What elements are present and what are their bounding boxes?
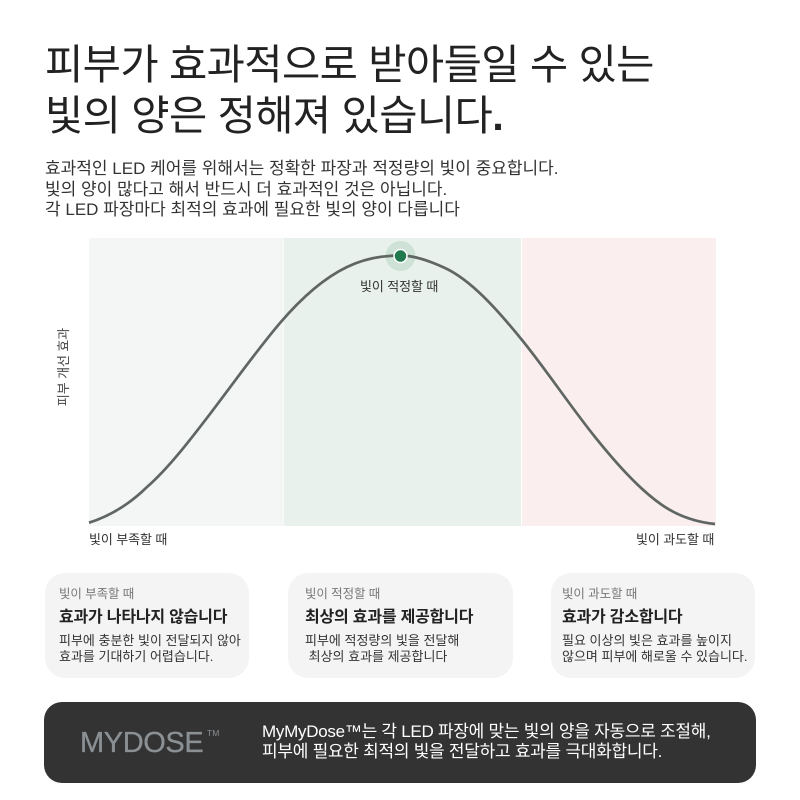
banner text: MyMyDose™는 각 LED 파장에 맞는 빛의 양을 자동으로 조절해, <box>262 722 711 741</box>
title <box>45 41 654 139</box>
panel text: 피부에 적정량의 빛을 전달해 <box>305 632 459 648</box>
intro text: 효과적인 LED 케어를 위해서는 정확한 파장과 적정량의 빛이 중요합니다. <box>45 159 558 178</box>
logo: MYDOSE <box>80 727 203 759</box>
panel tag: 빛이 과도할 때 <box>562 587 637 601</box>
logo: TM <box>207 728 219 738</box>
intro text: 각 LED 파장마다 최적의 효과에 필요한 빛의 양이 다릅니다 <box>45 200 460 219</box>
panel text: 효과를 기대하기 어렵습니다. <box>59 649 213 664</box>
zone: too little light <box>89 238 284 526</box>
zone: too much light <box>522 238 716 526</box>
banner text <box>262 722 711 760</box>
x axis label: low: 빛이 부족할 때 <box>89 532 167 547</box>
banner text: 피부에 필요한 최적의 빛을 전달하고 효과를 극대화합니다. <box>262 742 662 760</box>
panel: too much light <box>551 573 755 678</box>
x axis label: high: 빛이 과도할 때 <box>636 532 714 547</box>
panel text: 최상의 효과를 제공합니다 <box>309 649 447 664</box>
panel heading: 효과가 나타나지 않습니다 <box>59 609 227 626</box>
panel text: 피부에 충분한 빛이 전달되지 않아 <box>59 632 241 648</box>
title: 빛의 양은 정해져 있습니다. <box>45 92 503 139</box>
peak label: 빛이 적정할 때 <box>360 279 438 294</box>
peak halo <box>386 241 416 271</box>
panel tag: 빛이 적정할 때 <box>305 587 380 601</box>
panel: too little light <box>45 573 249 678</box>
panel: optimal light <box>288 573 513 678</box>
panel heading: 효과가 감소합니다 <box>562 609 682 626</box>
panel text <box>59 632 241 664</box>
panel text <box>305 632 459 664</box>
zone: optimal light <box>284 238 521 526</box>
intro text: 빛의 양이 많다고 해서 반드시 더 효과적인 것은 아닙니다. <box>45 180 447 198</box>
panel text <box>562 632 748 664</box>
panel text: 않으며 피부에 해로울 수 있습니다. <box>562 649 748 664</box>
y axis label: 피부 개선 효과 <box>56 328 70 406</box>
panel heading: 최상의 효과를 제공합니다 <box>305 609 473 626</box>
panel text: 필요 이상의 빛은 효과를 높이지 <box>562 632 732 648</box>
banner <box>44 702 756 783</box>
peak marker <box>394 250 407 262</box>
intro text <box>45 159 558 219</box>
panel tag: 빛이 부족할 때 <box>59 587 134 601</box>
response curve <box>89 256 715 524</box>
title: 피부가 효과적으로 받아들일 수 있는 <box>45 41 654 88</box>
